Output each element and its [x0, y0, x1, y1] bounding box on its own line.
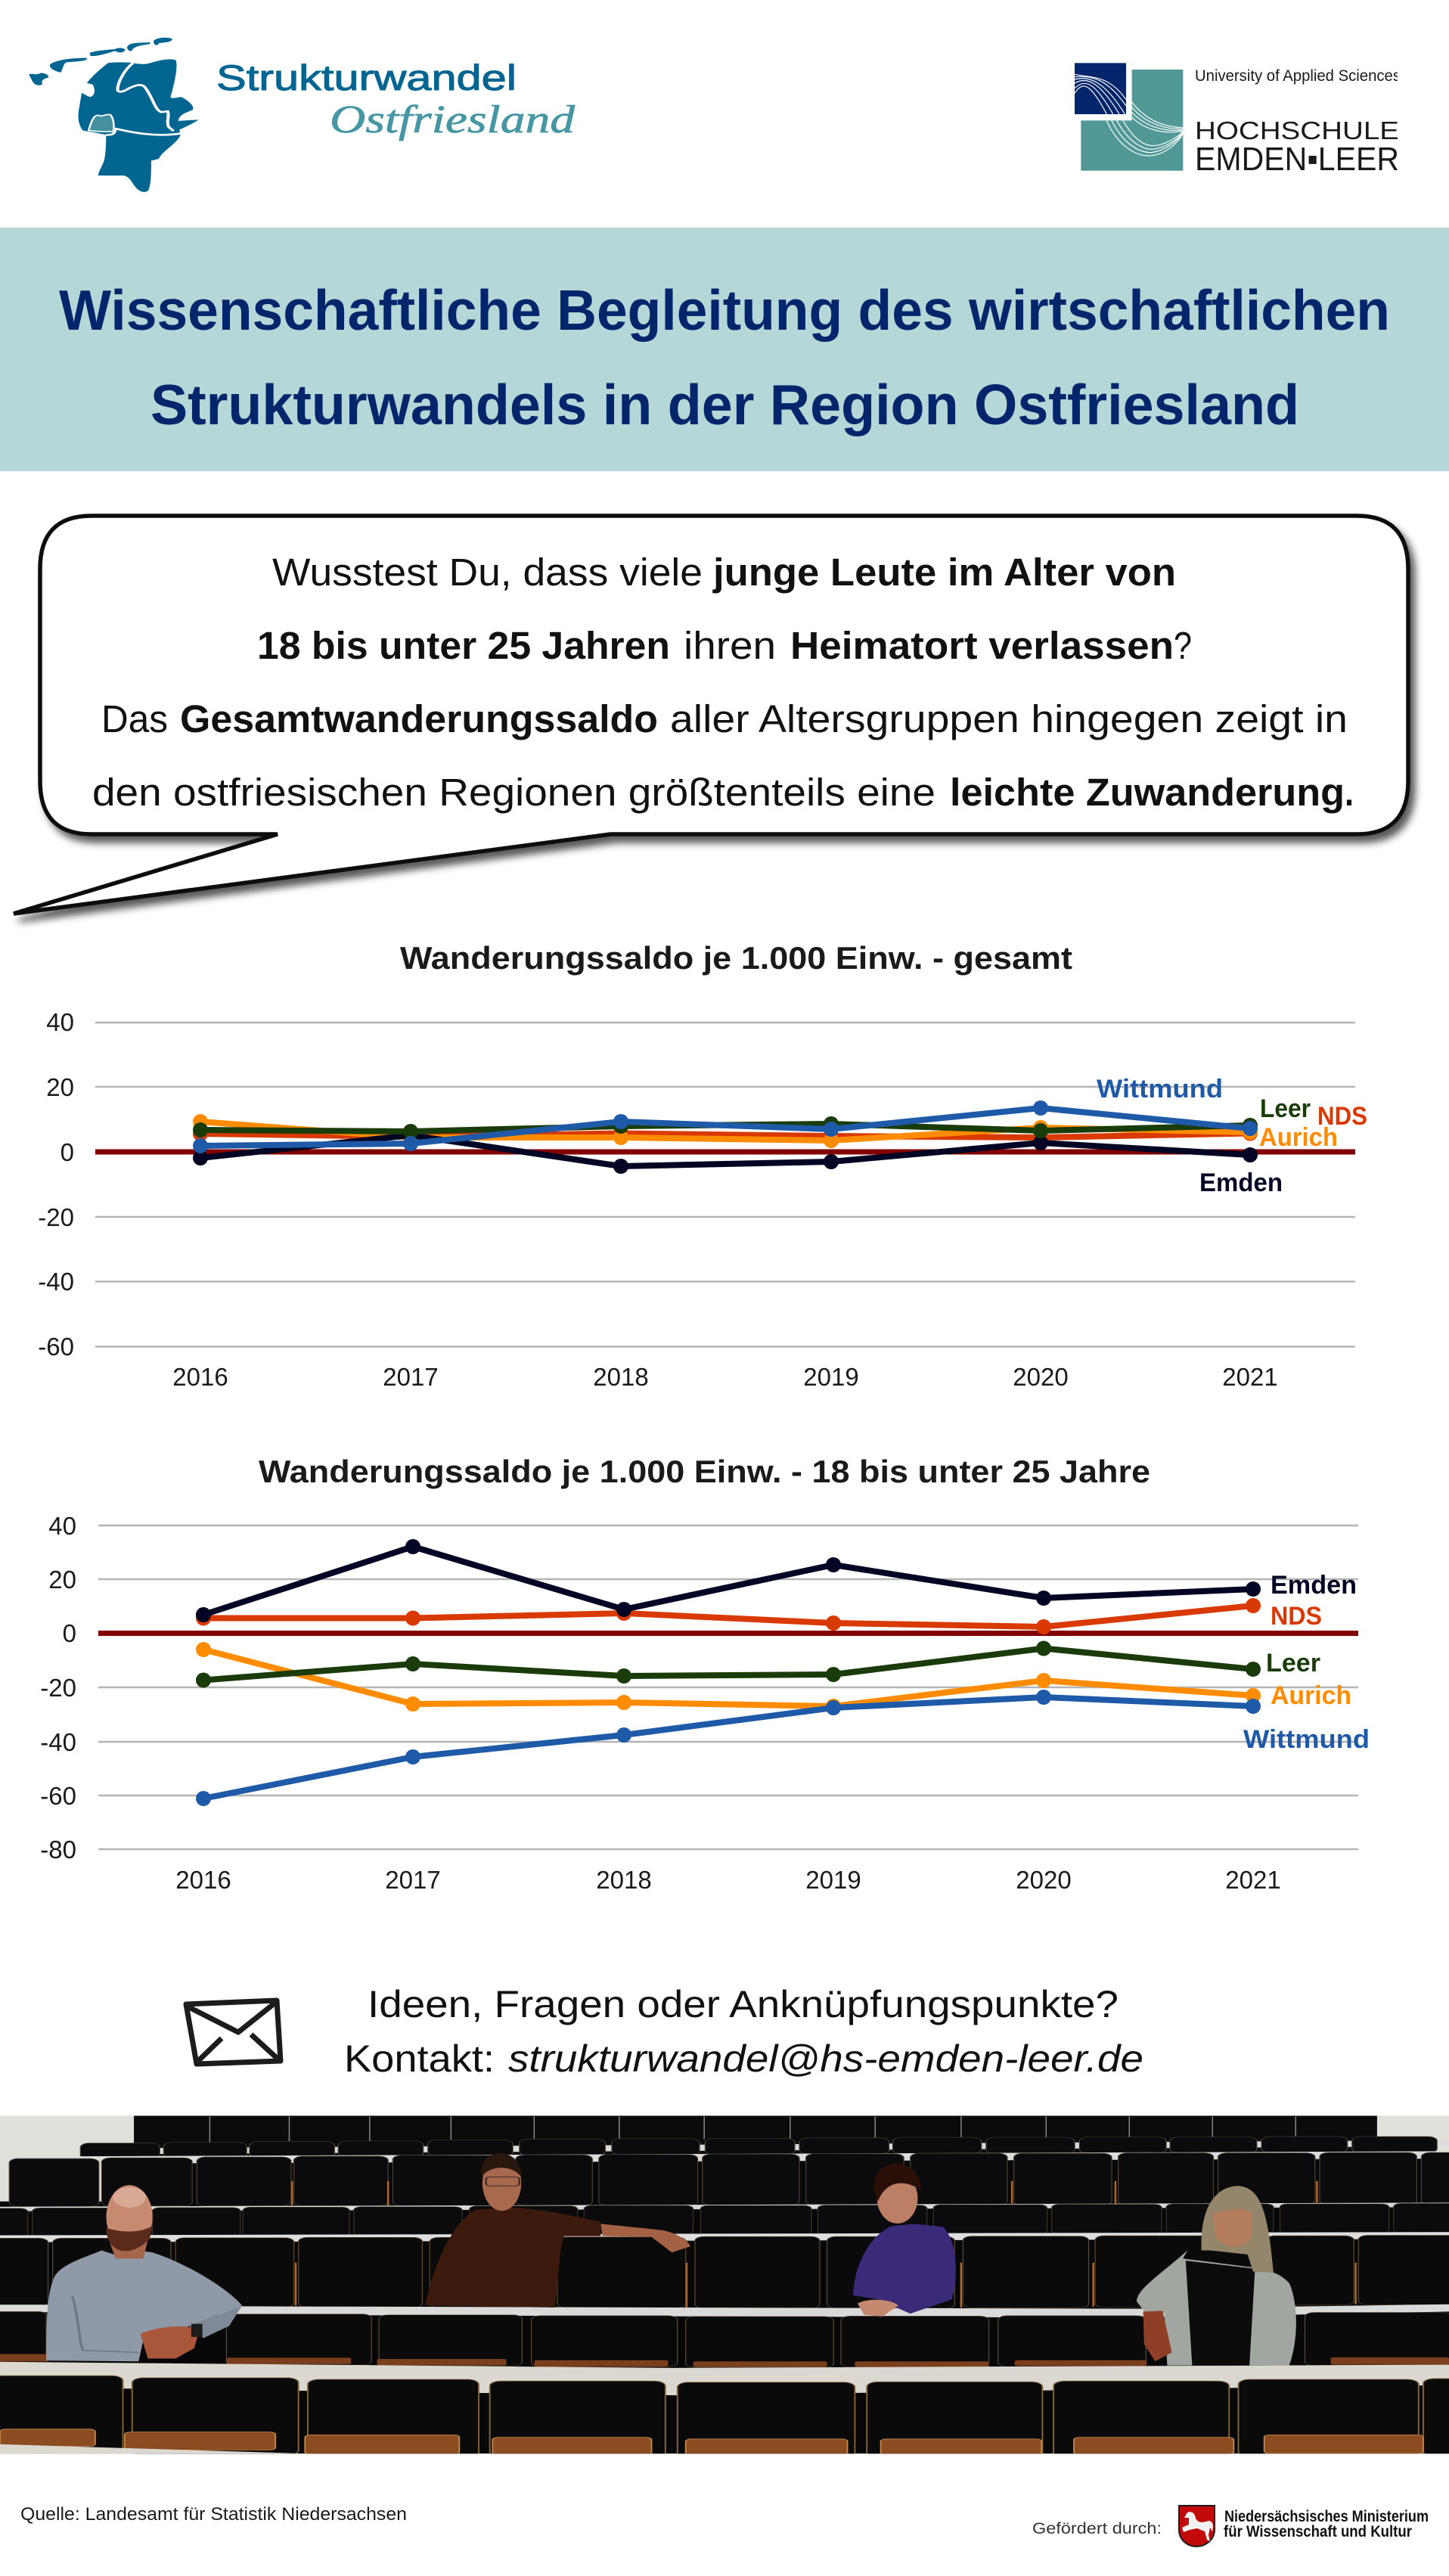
series labels [1243, 1571, 1370, 1754]
callout text [92, 551, 1354, 814]
series labels: Emden [1271, 1571, 1357, 1600]
series: Emden [193, 1128, 1258, 1174]
funding note [1032, 2506, 1429, 2547]
series: Wittmund [193, 1100, 1258, 1153]
y axis labels: 0 [63, 1619, 76, 1647]
series: Leer [196, 1641, 1261, 1688]
x axis labels: 2016 [175, 1866, 231, 1894]
x axis labels: 2019 [805, 1866, 861, 1894]
x axis labels [175, 1866, 1281, 1894]
callout text: ? [1174, 624, 1192, 667]
icon: envelope [186, 2000, 281, 2064]
person 2 [425, 2153, 690, 2308]
icon: Ostfriesland map [29, 38, 199, 192]
x axis labels: 2018 [593, 1363, 649, 1391]
callout text: Wusstest Du, dass viele [272, 551, 703, 594]
icon: university mark [1072, 61, 1183, 171]
y axis labels: -20 [38, 1203, 74, 1231]
series labels: Wittmund [1097, 1075, 1223, 1103]
y axis labels: -20 [40, 1674, 76, 1702]
brand region: Ostfriesland [330, 98, 576, 141]
y axis labels [38, 1008, 74, 1361]
y axis labels: 20 [48, 1566, 76, 1594]
logo: Strukturwandel Ostfriesland [29, 38, 576, 192]
person 1 [46, 2185, 242, 2361]
x axis labels: 2021 [1225, 1866, 1281, 1894]
person 3 [853, 2163, 956, 2317]
line chart: total migration balance [38, 940, 1367, 1391]
callout text: Gesamtwanderungssaldo [180, 697, 658, 740]
x axis labels: 2017 [385, 1866, 441, 1894]
series: Wittmund [196, 1690, 1261, 1806]
y axis labels: -40 [40, 1728, 76, 1756]
title: Wissenschaftliche Begleitung des wirtschaftlichen [59, 278, 1390, 342]
university text: University of Applied Sciences [1195, 67, 1401, 85]
title: Strukturwandels in der Region Ostfriesland [150, 373, 1299, 436]
callout text: 18 bis unter 25 Jahren [257, 624, 670, 667]
callout text: junge Leute im Alter von [712, 551, 1176, 594]
x axis labels: 2020 [1013, 1363, 1069, 1391]
contact text: strukturwandel@hs-emden-leer.de [508, 2038, 1143, 2080]
photo: team seated in lecture hall [0, 2115, 1449, 2460]
person 4 [1137, 2186, 1296, 2366]
y axis labels: -60 [40, 1782, 76, 1810]
logo: Hochschule Emden-Leer [1072, 61, 1401, 178]
line chart: migration balance 18 to under 25 [40, 1454, 1370, 1894]
y axis labels: 40 [46, 1008, 74, 1036]
contact text: Kontakt: [344, 2038, 495, 2080]
series labels: NDS [1271, 1602, 1322, 1631]
callout text: Heimatort verlassen [790, 624, 1174, 667]
series: NDS [196, 1598, 1261, 1634]
funding label: Gefördert durch: [1032, 2520, 1162, 2537]
zero line [95, 1150, 1355, 1154]
callout text: ihren [684, 624, 776, 667]
university text [1196, 70, 1398, 170]
source note: Quelle: Landesamt für Statistik Niedersachsen [20, 2504, 407, 2525]
university text: HOCHSCHULE [1195, 116, 1399, 144]
brand name: Strukturwandel [216, 57, 517, 98]
ministry name: für Wissenschaft und Kultur [1224, 2523, 1412, 2540]
title banner [0, 228, 1449, 471]
callout text: aller Altersgruppen hingegen zeigt in [670, 697, 1348, 740]
x axis labels: 2016 [172, 1363, 228, 1391]
icon: Lower Saxony crest [1179, 2506, 1215, 2547]
callout text: Das [101, 697, 168, 740]
x axis labels: 2021 [1222, 1363, 1278, 1391]
x axis labels: 2017 [383, 1363, 439, 1391]
y axis labels: 0 [61, 1138, 74, 1166]
x axis labels: 2019 [803, 1363, 859, 1391]
series labels: Emden [1199, 1169, 1283, 1197]
series labels: Leer [1266, 1649, 1320, 1678]
chart title: Wanderungssaldo je 1.000 Einw. - 18 bis unter 25 Jahre [259, 1454, 1150, 1489]
series labels: NDS [1317, 1102, 1367, 1131]
series labels: Aurich [1271, 1681, 1351, 1710]
callout text: leichte Zuwanderung [950, 771, 1345, 814]
y axis labels [40, 1512, 76, 1864]
series: Emden [196, 1539, 1261, 1622]
x axis labels: 2020 [1016, 1866, 1072, 1894]
university text: EMDEN▪LEER [1195, 141, 1399, 178]
ministry name [1224, 2508, 1429, 2540]
series: Aurich [193, 1114, 1258, 1148]
series labels: Leer [1260, 1094, 1311, 1123]
series labels: Wittmund [1243, 1725, 1370, 1754]
x axis labels: 2018 [596, 1866, 652, 1894]
callout text: . [1345, 771, 1354, 814]
contact text [344, 1983, 1143, 2080]
contact block [186, 1983, 1143, 2080]
y axis labels: -80 [40, 1836, 76, 1864]
y axis labels: 40 [48, 1512, 76, 1540]
y axis labels: 20 [46, 1073, 74, 1101]
series: NDS [193, 1125, 1258, 1145]
series: Aurich [196, 1642, 1261, 1714]
y axis labels: -60 [38, 1333, 74, 1361]
chart title: Wanderungssaldo je 1.000 Einw. - gesamt [400, 940, 1072, 976]
series: Leer [193, 1116, 1258, 1139]
callout: speech bubble [14, 516, 1408, 914]
series labels [1097, 1075, 1367, 1197]
contact text: Ideen, Fragen oder Anknüpfungspunkte? [368, 1983, 1119, 2025]
zero line [98, 1631, 1358, 1636]
y axis labels: -40 [38, 1268, 74, 1296]
callout text: den ostfriesischen Regionen größtenteils eine [92, 771, 935, 814]
title [59, 278, 1390, 436]
series labels: Aurich [1259, 1123, 1338, 1152]
x axis labels [172, 1363, 1278, 1391]
